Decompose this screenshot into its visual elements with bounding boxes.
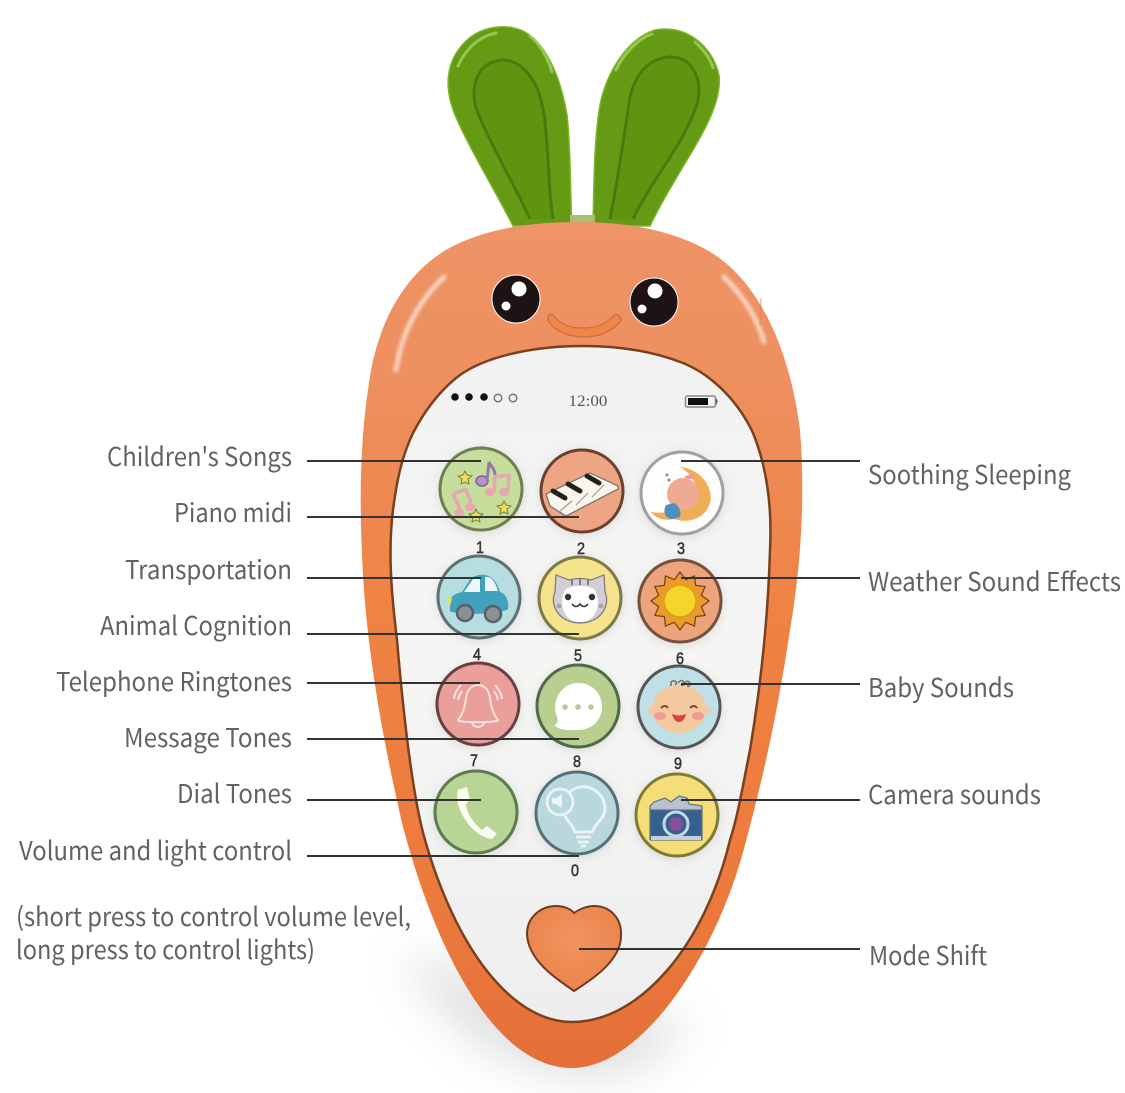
button 9: baby face [638,666,720,748]
signal dots [451,393,517,402]
button soft shadows [434,449,724,859]
button 3: baby on moon [641,452,723,534]
button 1: music notes [440,448,522,530]
button numbers: 3 [677,539,685,558]
button 12: camera [636,774,718,856]
label: Soothing Sleeping: Soothing Sleeping [868,455,1071,492]
button numbers: 0 [571,861,579,880]
button 5: cat [539,557,621,639]
button 6: sun [639,560,721,642]
button 4: car [438,556,520,638]
phone screen [390,346,770,1022]
carrot edge notches [364,266,761,452]
button 11: volume and light bulb [536,772,618,854]
icon: right rabbit ear [593,29,719,226]
button numbers: 1 [476,538,484,557]
button numbers: 4 [473,645,481,664]
label: Telephone Ringtones: Telephone Ringtones [56,662,292,699]
icon: left eye [492,275,540,323]
button numbers: 2 [577,539,585,558]
callout lines [307,461,860,949]
label: Children's Songs: Children's Songs [107,437,292,474]
note: long press: long press to control lights) [16,930,315,967]
note: short press: (short press to control volume level, [16,897,411,934]
button numbers: 6 [676,649,684,668]
button 8: message bubble [537,665,619,747]
icon: left rabbit ear [448,27,572,226]
carrot phone body [361,222,802,1068]
button 10: phone handset [435,771,517,853]
label: Piano midi: Piano midi [174,493,292,530]
icon: smile [548,314,621,337]
carrot stem band [570,215,595,226]
button numbers: 8 [573,752,581,771]
battery [686,396,718,407]
label: Transportation: Transportation [125,550,292,587]
status bar [451,393,718,410]
label: Dial Tones: Dial Tones [177,774,292,811]
button numbers: 9 [674,754,682,773]
label: Message Tones: Message Tones [124,718,292,755]
carrot face [492,275,678,337]
label: Animal Cognition: Animal Cognition [100,606,292,643]
rim highlight: shoulders [396,277,764,370]
label: Volume and light control: Volume and light control [19,831,292,868]
button numbers [470,538,685,880]
button numbers: 7 [470,751,478,770]
label: Baby Sounds: Baby Sounds [868,668,1014,705]
icon: right eye [630,278,678,326]
drop shadow [405,950,690,1078]
button 2: piano [541,450,623,532]
button 7: bell [437,663,519,745]
label: Camera sounds: Camera sounds [868,775,1041,812]
clock: 12:00 [568,393,608,410]
button numbers: 5 [574,646,582,665]
label: Mode Shift: Mode Shift [869,936,987,973]
mode shift heart button [527,906,621,991]
